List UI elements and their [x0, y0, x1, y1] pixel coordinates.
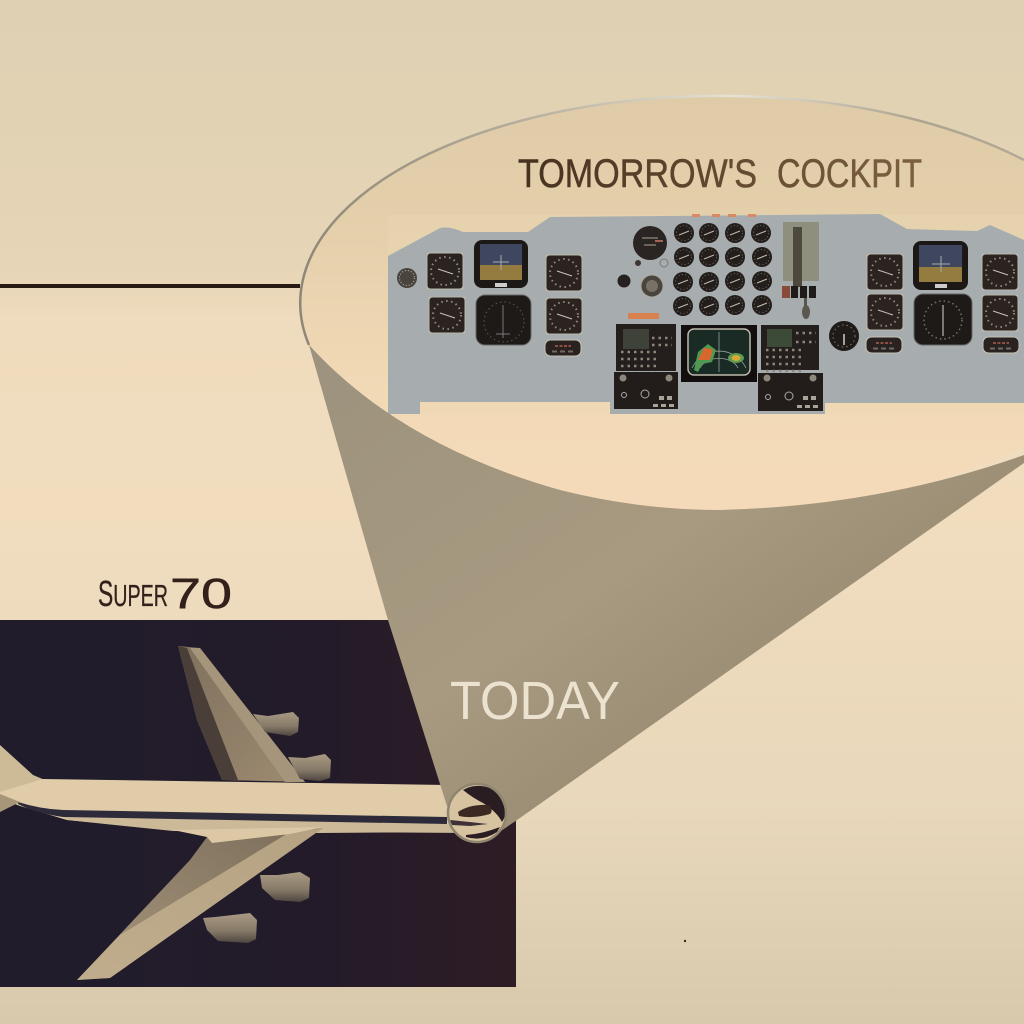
night sky: [0, 620, 516, 987]
upper wing: [178, 646, 305, 782]
panel shape: [388, 214, 1024, 414]
throttle plate: [782, 222, 819, 319]
weather radar display: [681, 325, 757, 382]
fuselage: [0, 779, 470, 833]
warning lights: [692, 214, 756, 217]
tail fin: [0, 745, 45, 794]
centre engine gauges: [618, 223, 772, 319]
heading: tomorrow's cockpit: TOMORROW'S: [518, 152, 757, 196]
window stripe: [18, 802, 447, 824]
standby gauge: [829, 321, 859, 351]
left clock: [397, 268, 417, 288]
left attitude indicator: [474, 240, 528, 288]
heading: super 70: 70: [170, 570, 232, 618]
lower fuselage shade: [63, 817, 470, 833]
left flight management unit: [616, 324, 676, 373]
tailplane: [0, 794, 20, 812]
projection cone: [309, 345, 1024, 833]
upper engines: [253, 712, 331, 781]
photo: Super 70 aircraft: [0, 620, 516, 987]
lens ellipse: [300, 96, 1024, 510]
right flight management unit: [761, 325, 819, 371]
magnified nose circle: [448, 784, 506, 842]
lower wing: [77, 827, 323, 980]
today label: TODAY: [450, 671, 620, 731]
cockpit instrument panel: [388, 214, 1024, 414]
heading: super 70: SUPER: [98, 573, 168, 614]
left horizontal situation indicator: [476, 295, 531, 345]
panel backing: [388, 215, 1024, 414]
left control head: [614, 372, 678, 409]
speck: [684, 940, 686, 942]
right flight instruments: [866, 254, 1020, 354]
left flight instruments: [426, 252, 582, 356]
heading: tomorrow's cockpit: COCKPIT: [777, 152, 922, 196]
lower engines: [203, 872, 310, 943]
right control head: [758, 373, 823, 411]
right attitude indicator: [913, 241, 968, 290]
heading: tomorrow's cockpit: [518, 152, 922, 196]
heading: super 70: [98, 570, 232, 618]
horizontal rule: [0, 284, 300, 288]
right horizontal situation indicator: [914, 294, 972, 345]
